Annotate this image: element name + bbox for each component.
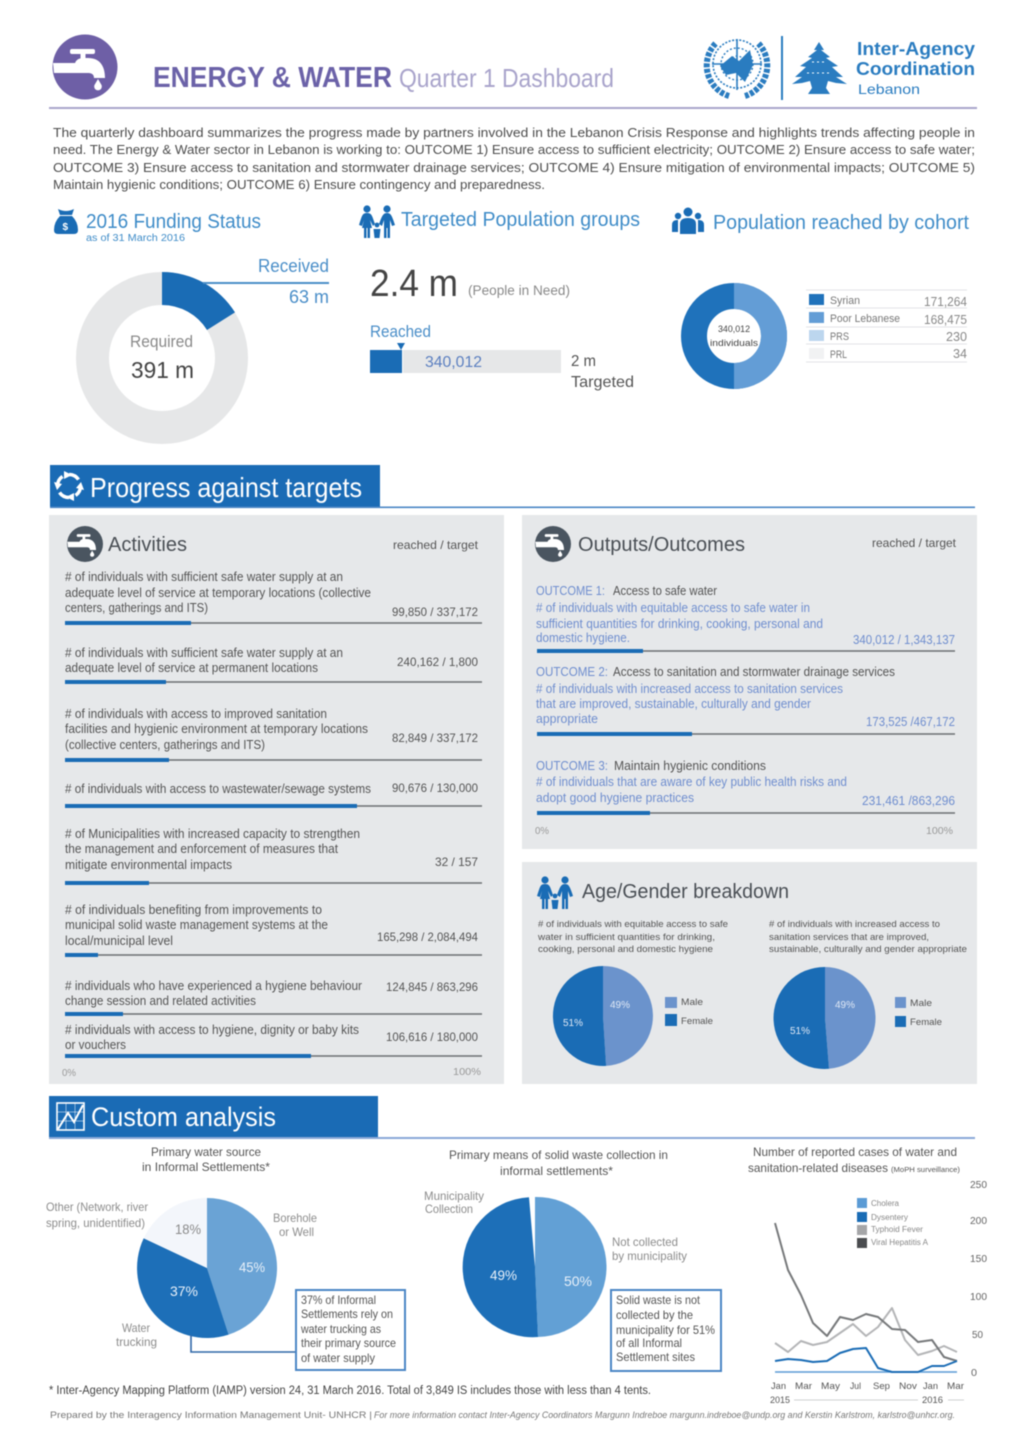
legend: water gender split: Male [681, 997, 703, 1008]
pie chart: water source: 18% [175, 1221, 201, 1237]
table: cohort legend: PRL [830, 349, 847, 361]
table: cohort legend: PRS [830, 331, 849, 343]
callout: solid waste: municipality for 51% [616, 1323, 715, 1337]
pie chart: water source [137, 1198, 277, 1338]
indicator: hygiene kits [65, 1023, 482, 1056]
indicator: hygiene session: # individuals who have experienced a hygiene behaviour [65, 979, 362, 993]
logo: United Nations emblem [707, 39, 767, 96]
outcome 2: that are improved, sustainable, culturally and gender [536, 697, 811, 711]
pie labels: spring, unidentified) [46, 1216, 145, 1230]
pie labels: Collection [425, 1202, 473, 1216]
heading: funding status: 2016 Funding Status [86, 211, 261, 233]
legend: sanitation gender split [895, 997, 942, 1028]
callout: solid waste: collected by the [616, 1308, 693, 1322]
x axis labels: Jul [850, 1381, 861, 1392]
icon: family [537, 876, 573, 909]
panel: activities [49, 515, 504, 1084]
callout: water trucking: 37% of Informal [301, 1293, 376, 1307]
indicator: municipalities [65, 827, 482, 883]
chart title [449, 1148, 668, 1178]
heading: activities: Activities [108, 534, 187, 556]
title: ENERGY & WATER [153, 62, 392, 94]
outcome 1 [536, 584, 955, 651]
description: sanitation [769, 919, 967, 955]
donut chart: cohort share [694, 296, 774, 376]
y axis labels: 0 [971, 1368, 977, 1379]
callout: water trucking: of water supply [301, 1351, 375, 1365]
intro text: need. The Energy & Water sector in Lebanon is working to: OUTCOME 1) Ensure access to sufficient electricity; OUTCOME 2) Ensure access to safe water; [53, 142, 975, 157]
x axis labels: Jan [771, 1381, 786, 1392]
chart title: Primary means of solid waste collection in [449, 1148, 668, 1162]
indicator: safe water permanent [65, 646, 482, 682]
donut chart: required vs received: Required [130, 332, 193, 351]
line chart: disease cases [775, 1223, 957, 1372]
outcome 3: # of individuals that are aware of key public health risks and [536, 775, 847, 789]
donut chart: cohort share: 340,012 [718, 324, 750, 334]
stat: people in need: 2.4 m [370, 263, 458, 305]
pie chart: water gender split [553, 966, 653, 1066]
logo text: Inter-Agency Coordination Lebanon [856, 39, 975, 97]
table: cohort legend: Poor Lebanese [830, 313, 900, 325]
outcome 3: OUTCOME 3: [536, 759, 608, 773]
outcome 2 [536, 665, 955, 734]
outcome 3: Maintain hygienic conditions [614, 759, 766, 773]
section header: progress against targets [50, 465, 975, 508]
y axis labels: 50 [972, 1330, 983, 1341]
logo divider [781, 36, 783, 100]
heading: age/gender: Age/Gender breakdown [582, 881, 789, 903]
outcome 3: 231,461 /863,296 [862, 794, 955, 808]
x axis labels: Jan [923, 1381, 938, 1392]
indicator: safe water temporary: adequate level of service at temporary locations (collective [65, 586, 371, 600]
axis labels: 0% [62, 1068, 76, 1079]
heading: outputs/outcomes: reached / target [872, 536, 957, 550]
credits [50, 1410, 955, 1421]
pie chart: waste collection: 50% [564, 1273, 592, 1289]
chart panel: primary water source [46, 1145, 405, 1370]
callout: solid waste: of all Informal [616, 1336, 682, 1350]
title [153, 62, 614, 94]
indicator: hygiene session: 124,845 / 863,296 [386, 980, 478, 994]
outcome 1: domestic hygiene. [536, 631, 630, 645]
pie labels: Other (Network, river [46, 1200, 148, 1214]
table: cohort legend: 230 [946, 330, 967, 344]
x axis labels: Mar [795, 1381, 812, 1392]
pie labels: Municipality [424, 1189, 484, 1203]
chart title [142, 1145, 270, 1174]
y axis labels: 200 [970, 1216, 987, 1227]
legend: water gender split [665, 997, 713, 1027]
outcome 2: 173,525 /467,172 [866, 715, 955, 729]
intro text: Maintain hygienic conditions; OUTCOME 6) Ensure contingency and preparedness. [53, 177, 545, 192]
callout: water trucking: Settlements rely on [301, 1307, 393, 1321]
logo text: Inter-Agency Coordination Lebanon: Coordination [856, 59, 975, 79]
description: water: cooking, personal and domestic hygiene [538, 944, 713, 955]
outcome 1: 340,012 / 1,343,137 [853, 633, 955, 647]
chart title: informal settlements* [500, 1164, 613, 1178]
indicator: solid waste: # of individuals benefiting from improvements to [65, 903, 322, 917]
title: Quarter 1 Dashboard [399, 63, 614, 93]
chart title: (MoPH surveillance) [891, 1167, 960, 1174]
chart panel: reported diseases [748, 1145, 987, 1406]
chart title: sanitation-related diseases [748, 1161, 888, 1175]
callout: received amount: Received [258, 256, 329, 276]
section header: progress against targets: Progress against targets [90, 472, 362, 503]
logo text: Inter-Agency Coordination Lebanon: Lebanon [858, 81, 920, 97]
axis labels: 0% [535, 826, 549, 837]
icon: group of people [672, 208, 704, 234]
progress bar: reached vs targeted: 2 m [571, 353, 596, 370]
table: cohort legend: 168,475 [924, 313, 967, 327]
indicator: solid waste: local/municipal level [65, 934, 173, 948]
pie labels: by municipality [612, 1249, 687, 1263]
progress bar: reached vs targeted: Targeted [571, 374, 634, 391]
indicator: solid waste: municipal solid waste management systems at the [65, 918, 328, 932]
axis labels [535, 826, 953, 837]
y axis labels [970, 1180, 987, 1379]
logo text: Inter-Agency Coordination Lebanon: Inter-Agency [857, 39, 975, 59]
legend: diseases: Viral Hepatitis A [871, 1238, 929, 1247]
donut chart: required vs received [92, 272, 235, 428]
indicator: hygiene kits: # individuals with access to hygiene, dignity or baby kits [65, 1023, 359, 1037]
callout: received amount: 63 m [289, 287, 329, 307]
table: cohort legend: Syrian [830, 295, 860, 307]
outcome 3 [536, 759, 955, 813]
pie chart: water gender split: 51% [563, 1018, 583, 1029]
pie labels: Not collected [612, 1235, 678, 1249]
axis labels: 100% [926, 826, 953, 837]
outcome 2: OUTCOME 2: [536, 665, 608, 679]
panel: age and gender breakdown [522, 862, 977, 1084]
outcome 1: sufficient quantities for drinking, cooking, personal and [536, 617, 823, 631]
chart title: Primary water source [151, 1145, 261, 1159]
icon: money bag [54, 209, 78, 234]
panel: outputs and outcomes [522, 515, 977, 849]
axis labels: 100% [453, 1067, 481, 1078]
pie chart: sanitation gender split: 51% [790, 1026, 810, 1037]
heading: funding status: as of 31 March 2016 [86, 233, 185, 244]
y axis labels: 100 [970, 1292, 987, 1303]
logo: cedar tree [792, 42, 847, 94]
outcome 1: OUTCOME 1: [536, 584, 605, 598]
pie labels [424, 1189, 687, 1263]
pie labels: trucking [116, 1335, 157, 1349]
pie chart: sanitation gender split [774, 967, 876, 1069]
table: cohort legend: 34 [953, 347, 967, 361]
indicator: safe water temporary: # of individuals with sufficient safe water supply at an [65, 570, 343, 584]
pie chart: water source: 37% [170, 1283, 198, 1299]
indicator: hygiene session: change session and related activities [65, 994, 256, 1008]
heading: funding status [86, 211, 261, 244]
indicator: hygiene session [65, 979, 482, 1014]
description: water: # of individuals with equitable access to safe [538, 919, 728, 930]
x axis labels: Sep [873, 1381, 890, 1392]
indicator: sanitation: facilities and hygienic environment at temporary locations [65, 722, 368, 736]
x axis labels: Nov [899, 1381, 917, 1392]
indicator: safe water permanent: 240,162 / 1,800 [397, 655, 478, 669]
indicator: wastewater [65, 781, 482, 806]
heading: outputs/outcomes: Outputs/Outcomes [578, 534, 745, 556]
icon: tap [535, 526, 571, 562]
indicator: solid waste [65, 903, 482, 955]
intro text: The quarterly dashboard summarizes the progress made by partners involved in the Lebanon Crisis Response and highlights trends affecting people in [53, 125, 975, 140]
callout: water trucking: water trucking as [300, 1322, 381, 1336]
donut chart: required vs received: 391 m [131, 357, 194, 383]
pie chart: waste collection [463, 1197, 607, 1337]
pie chart: sanitation gender split: 49% [835, 1000, 855, 1011]
indicator: hygiene kits: or vouchers [65, 1038, 126, 1052]
callout: solid waste [611, 1290, 721, 1371]
pie chart: waste collection: 49% [490, 1267, 517, 1283]
icon: money bag: $ [62, 222, 68, 233]
indicator: hygiene kits: 106,616 / 180,000 [386, 1030, 478, 1044]
indicator: sanitation: # of individuals with access to improved sanitation [65, 707, 327, 721]
description: water [537, 919, 728, 955]
description: water: water in sufficient quantities for drinking, [537, 932, 715, 943]
x axis labels: Mar [947, 1381, 964, 1392]
x axis labels: 2016 [922, 1395, 943, 1406]
outcome 1: # of individuals with equitable access to safe water in [536, 601, 810, 615]
description: sanitation: sanitation services that are improved, [769, 932, 929, 943]
axis labels [62, 1067, 481, 1079]
credits: Prepared by the Interagency Information Management Unit- UNHCR | [50, 1410, 372, 1421]
indicator: municipalities: the management and enforcement of measures that [65, 842, 338, 856]
indicator: safe water permanent: # of individuals with sufficient safe water supply at an [65, 646, 343, 660]
indicator: municipalities: # of Municipalities with increased capacity to strengthen [65, 827, 360, 841]
heading: outputs/outcomes [578, 534, 957, 556]
section header: custom analysis: Custom analysis [91, 1102, 276, 1132]
callout: solid waste: Solid waste is not [616, 1293, 701, 1307]
chart title: Number of reported cases of water and [753, 1145, 957, 1159]
progress bar: reached vs targeted [370, 322, 634, 391]
indicator: sanitation: (collective centers, gatherings and ITS) [65, 738, 265, 752]
panel: population reached by cohort [672, 208, 969, 376]
indicator: sanitation [65, 707, 482, 760]
legend: diseases: Cholera [871, 1199, 900, 1208]
indicator: safe water temporary: centers, gatherings and ITS) [65, 601, 208, 615]
description: sanitation: sustainable, culturally and gender appropriate [769, 944, 967, 955]
chart title: in Informal Settlements* [142, 1160, 270, 1174]
outcome 3: adopt good hygiene practices [536, 791, 694, 805]
pie labels: Water [122, 1321, 150, 1335]
legend: diseases [857, 1198, 929, 1248]
outcome 2: appropriate [536, 712, 598, 726]
legend: diseases: Dysentery [871, 1213, 908, 1222]
callout: solid waste: Settlement sites [616, 1350, 695, 1364]
icon: family [359, 205, 395, 238]
callout: received amount [203, 256, 329, 307]
panel: targeted population groups [359, 205, 640, 391]
heading: activities: reached / target [393, 538, 479, 552]
heading: population reached: Population reached by cohort [713, 212, 969, 234]
indicator: safe water temporary: 99,850 / 337,172 [392, 605, 478, 619]
description: sanitation: # of individuals with increased access to [769, 919, 940, 930]
pie labels: or Well [279, 1225, 314, 1239]
x axis labels: 2015 [770, 1395, 790, 1406]
indicator: safe water permanent: adequate level of service at permanent locations [65, 661, 318, 675]
table: cohort legend [806, 290, 967, 362]
progress bar: reached vs targeted: 340,012 [425, 354, 482, 371]
indicator: municipalities: mitigate environmental impacts [65, 858, 232, 872]
credits: For more information contact Inter-Agency Coordinators Margunn Indreboe margunn.indreboe@undp.org and Kerstin Karlstrom, karlstro@unhcr.org. [374, 1410, 955, 1421]
pie labels: Borehole [273, 1211, 317, 1225]
outcome 2: # of individuals with increased access to sanitation services [536, 682, 843, 696]
icon: water tap emblem [52, 34, 118, 100]
footnote: * Inter-Agency Mapping Platform (IAMP) version 24, 31 March 2016. Total of 3,849 IS includes those with less than 4 tents. [49, 1385, 651, 1397]
panel: funding status [54, 209, 329, 428]
stat: people in need [370, 263, 570, 305]
legend: water gender split: Female [681, 1016, 713, 1027]
legend: sanitation gender split: Female [910, 1017, 942, 1028]
icon: tap [67, 526, 103, 562]
intro text [53, 125, 975, 192]
connector arrow [191, 1335, 296, 1352]
outcome 2: Access to sanitation and stormwater drainage services [613, 665, 895, 679]
table: cohort legend: 171,264 [924, 295, 967, 309]
header divider [49, 107, 977, 109]
outcome 1: Access to safe water [613, 584, 717, 598]
pie chart: water gender split: 49% [610, 1000, 630, 1011]
x axis labels: May [821, 1381, 840, 1392]
indicator: wastewater: 90,676 / 130,000 [392, 781, 478, 795]
heading: targeted population: Targeted Population groups [401, 209, 640, 231]
chart panel: solid waste collection [424, 1148, 721, 1371]
callout: water trucking [296, 1290, 405, 1370]
progress bar: reached vs targeted: Reached [370, 322, 431, 341]
intro text: OUTCOME 3) Ensure access to sanitation and stormwater drainage services; OUTCOME 4) Ensure mitigation of environmental impacts; OUTCOME 5) [53, 160, 975, 175]
pie labels [46, 1200, 317, 1349]
indicator: municipalities: 32 / 157 [435, 855, 478, 869]
donut chart: cohort share: individuals [710, 338, 759, 348]
indicator: sanitation: 82,849 / 337,172 [392, 731, 478, 745]
chart title [748, 1145, 960, 1175]
stat: people in need: (People in Need) [468, 282, 570, 298]
legend: diseases: Typhoid Fever [871, 1225, 923, 1234]
y axis labels: 150 [970, 1254, 987, 1265]
heading: activities [108, 534, 479, 556]
indicator: safe water temporary [65, 570, 482, 623]
callout: water trucking: their primary source [301, 1336, 396, 1350]
legend: sanitation gender split: Male [910, 998, 932, 1009]
indicator: solid waste: 165,298 / 2,084,494 [377, 930, 478, 944]
y axis labels: 250 [970, 1180, 987, 1191]
x axis labels [770, 1381, 964, 1406]
pie chart: water source: 45% [239, 1259, 265, 1275]
indicator: wastewater: # of individuals with access to wastewater/sewage systems [65, 782, 371, 796]
section header: custom analysis [49, 1096, 975, 1139]
